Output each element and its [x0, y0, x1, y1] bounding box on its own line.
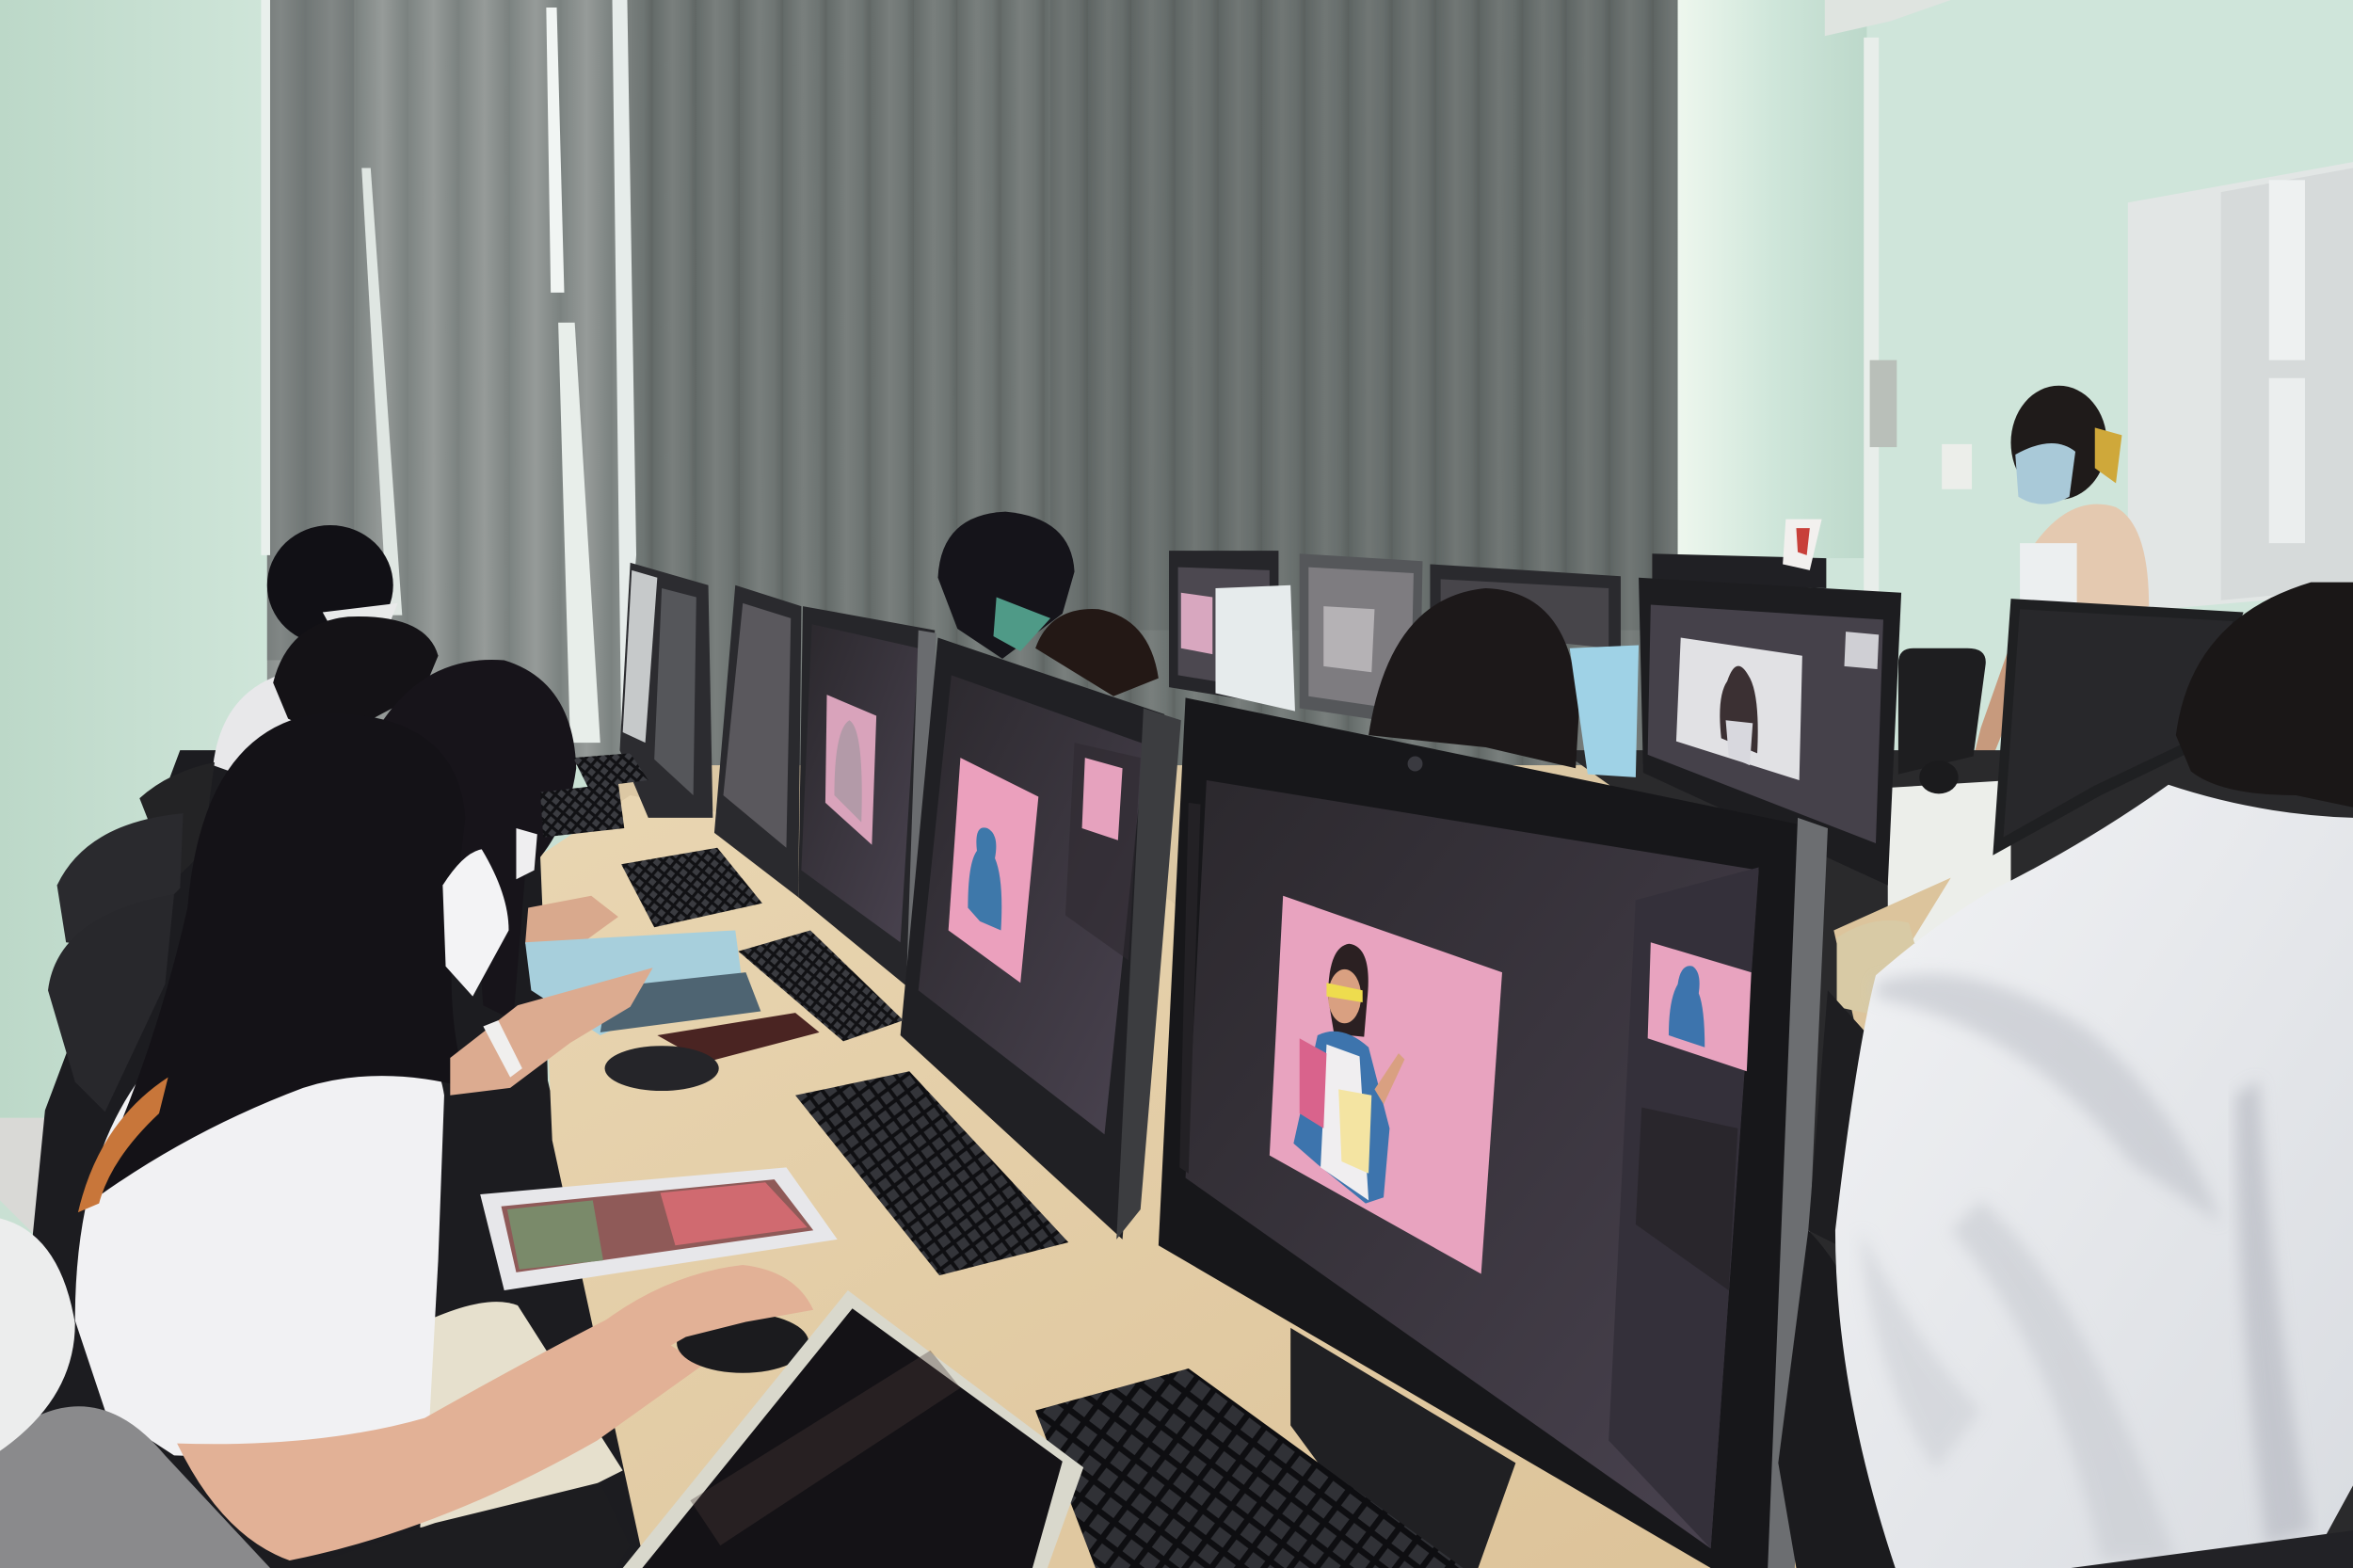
monitor row 4: [714, 585, 801, 897]
keyboard row 4: [621, 848, 762, 927]
man on right: head: [2176, 583, 2353, 808]
mouse on desk: [605, 1046, 719, 1091]
far-right white desk: [1888, 780, 2010, 960]
woman in photo: [1293, 944, 1404, 1204]
thermostat: [1942, 444, 1972, 489]
ceiling fixture: [1825, 0, 1951, 36]
keyboard row 3: [738, 930, 904, 1041]
pillar: [1678, 0, 1866, 558]
forearm and hand on tablet: [450, 968, 653, 1096]
man on right: shirt: [1835, 785, 2353, 1568]
preview thumbnail: [1648, 942, 1752, 1071]
monitor stand: [1290, 1328, 1515, 1568]
left wall: [0, 0, 285, 1118]
monitor row 2 with pink photo: [901, 638, 1181, 1240]
far right black monitor: [1993, 599, 2244, 856]
backdrop behind far right desks: [1561, 750, 2353, 1568]
curtain: main blinds: [627, 0, 1678, 765]
front student: mask: [442, 849, 508, 997]
orange hair tips: [78, 1078, 168, 1212]
sign with red mark: [1783, 520, 1822, 570]
whiteboard: [2128, 162, 2353, 612]
desk right segment: [1833, 878, 1951, 1050]
webcam: [1408, 757, 1422, 771]
right chair back: [1778, 1230, 1931, 1568]
front student: arm: [177, 1313, 702, 1560]
backdrop below the blinds: [616, 750, 1696, 945]
student behind monitors: [937, 512, 1159, 696]
student with long hair in back: [1369, 588, 1578, 768]
right back monitor: [1639, 578, 1901, 886]
keyboard row 5: [540, 753, 648, 838]
middle student: [381, 660, 618, 1020]
monitor row 3: [798, 606, 936, 993]
drawing tablet: [480, 1167, 838, 1290]
back student in white shirt: [213, 525, 398, 792]
hand on mouse: [578, 1265, 813, 1388]
keyboard row 2: [795, 1071, 1068, 1275]
backdrop of chairs and shadow at left of desk: [0, 750, 661, 1568]
chair arm right: [1808, 990, 1868, 1245]
monitor far left row 5: [619, 563, 712, 818]
blue bag: [1570, 646, 1639, 777]
chair corner bottom right: [2071, 1530, 2353, 1568]
far black chair: [1898, 648, 1986, 775]
black tablet in foreground: [623, 1290, 1083, 1568]
wall switch: [1870, 360, 1897, 447]
right wall: [1678, 0, 2353, 780]
back row monitor 2: [1300, 553, 1422, 727]
back row monitor 4: [1652, 553, 1826, 588]
front student: shirt: [75, 1020, 444, 1463]
bracelet: [483, 1020, 522, 1078]
smartphone on desk: [657, 1013, 820, 1063]
front student: hair: [83, 712, 468, 1208]
canvas tote on right: [1837, 920, 1918, 1016]
back row monitor 3: [1430, 564, 1621, 648]
chair backs: [48, 762, 215, 1112]
main keyboard: [1035, 1368, 1464, 1568]
mouse under hand: [677, 1313, 808, 1373]
floor strip: [0, 1118, 90, 1290]
teacher: [1969, 386, 2149, 778]
foreground chair arm: [300, 1482, 631, 1568]
front student: tote bag: [420, 1302, 623, 1528]
foreground person: grey sweater: [0, 1406, 270, 1568]
foreground person: white mask: [0, 1219, 75, 1451]
panel controls: [1636, 1108, 1737, 1290]
curtain: left blinds: [261, 0, 636, 765]
photo on main screen: [1270, 896, 1502, 1274]
photoshop toolbar: [1179, 803, 1201, 1174]
main monitor: [1159, 697, 1828, 1568]
student with hair bun: [273, 616, 439, 740]
tablet with blue case: [525, 930, 760, 1035]
wall conduit: [1864, 38, 1879, 593]
headset on desk: [1919, 760, 1959, 793]
desk surface: [540, 795, 1861, 1568]
back row monitor 1: [1169, 551, 1295, 712]
